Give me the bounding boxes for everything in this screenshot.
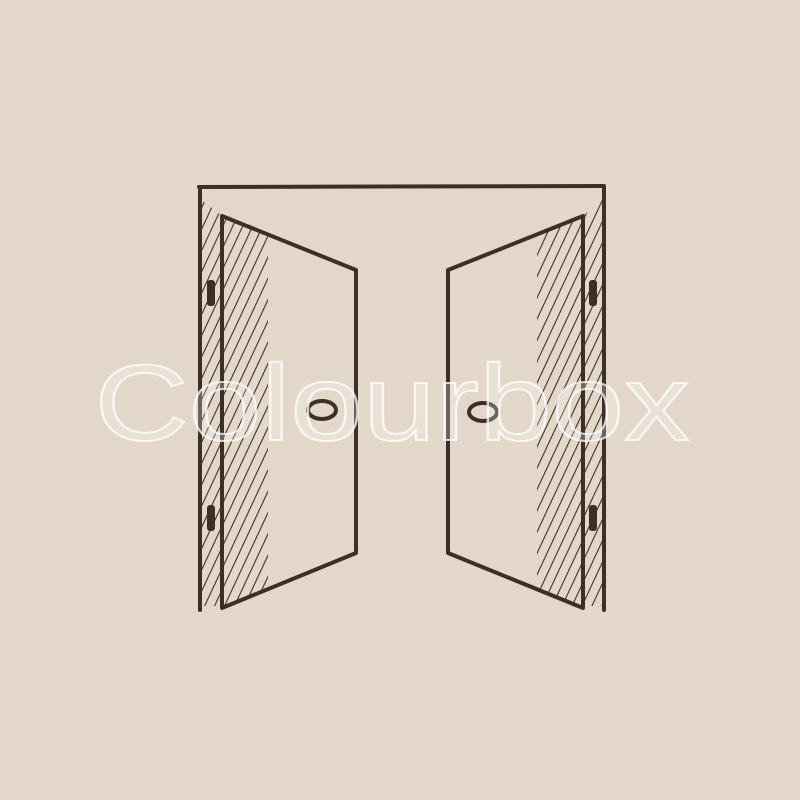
handle right [469, 403, 497, 421]
handle left [308, 401, 336, 419]
right door [448, 200, 602, 608]
watermark: Colourbox [94, 342, 690, 463]
door frame [199, 186, 604, 610]
left door [202, 200, 356, 608]
